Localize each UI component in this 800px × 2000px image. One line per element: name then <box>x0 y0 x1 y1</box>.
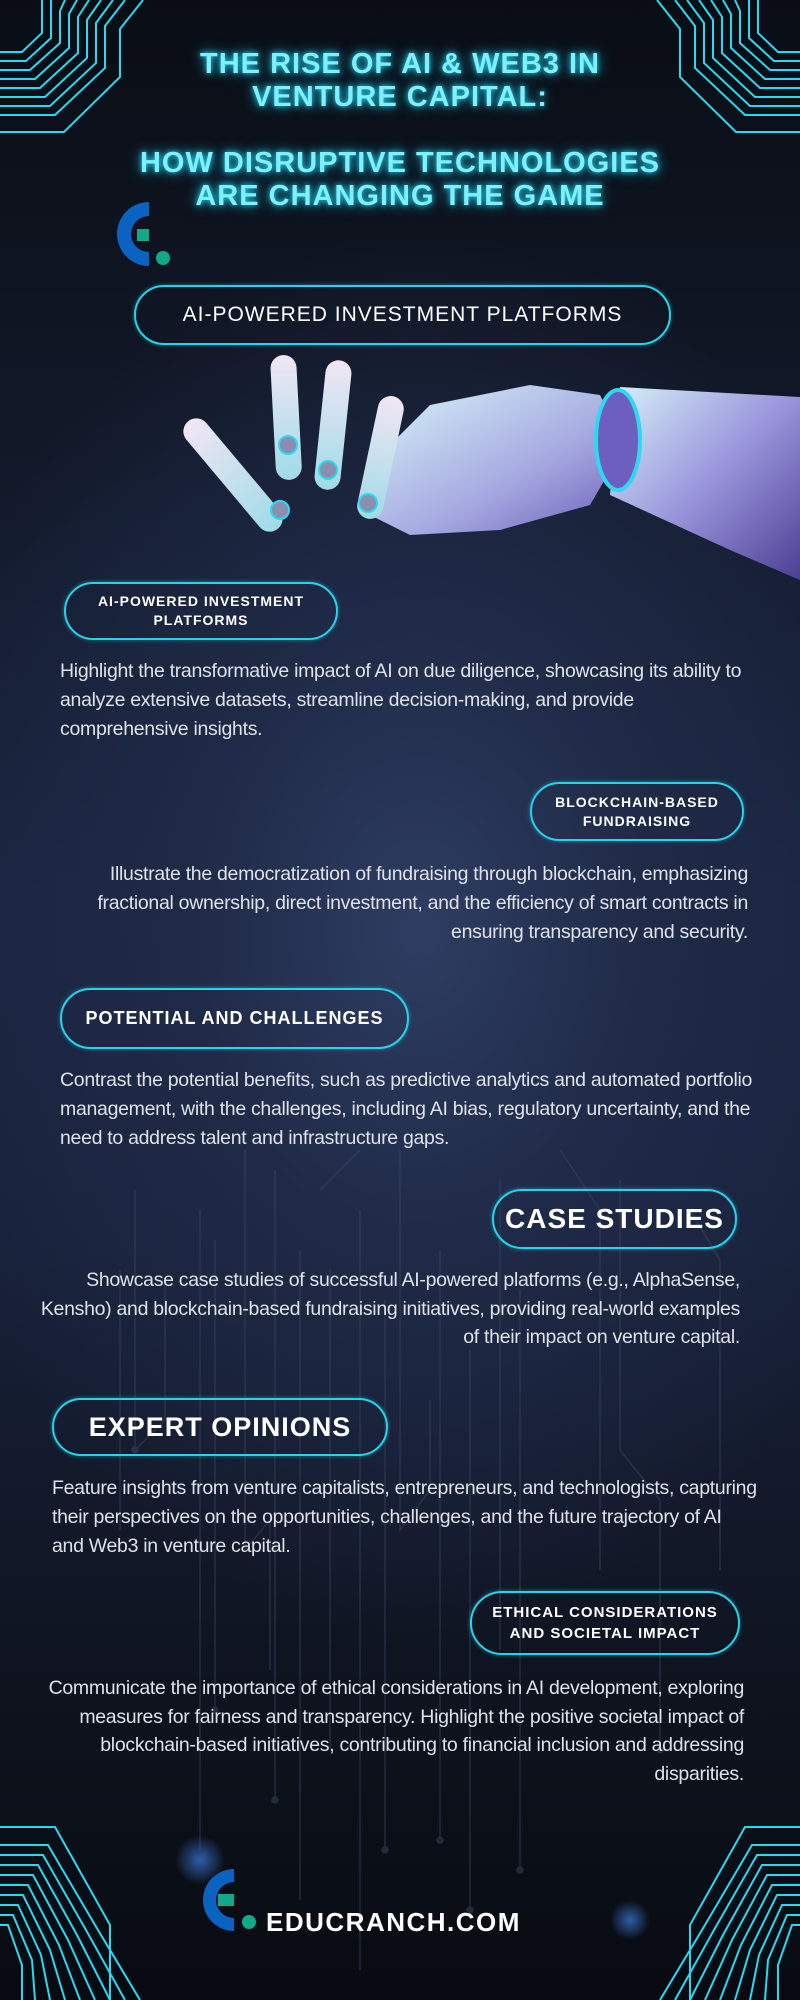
pill: AI-powered investment platforms: PLATFORMS <box>153 612 249 628</box>
pill: ethical considerations: ETHICAL CONSIDERATIONS <box>492 1604 718 1621</box>
glow dots <box>175 1835 225 1885</box>
text: case studies description <box>41 1269 740 1348</box>
pill: AI-powered investment platforms: AI-POWERED INVESTMENT <box>98 593 304 609</box>
text: ethical description: Communicate the importance of ethical considerations in AI development, exploring <box>49 1677 744 1699</box>
text: expert opinions description <box>52 1477 757 1557</box>
pill: potential and challenges <box>60 988 409 1049</box>
text: case studies description: Kensho) and blockchain-based fundraising initiatives, providing real-world examples <box>41 1298 740 1320</box>
logo: top <box>117 202 170 266</box>
pill: case studies <box>492 1189 737 1249</box>
title: HOW DISRUPTIVE TECHNOLOGIES <box>140 147 660 179</box>
text: AI platforms description: comprehensive insights. <box>60 718 262 740</box>
footer: logo and website <box>203 1869 521 1937</box>
title <box>132 44 666 214</box>
decoration: top-left circuit corner <box>0 0 144 133</box>
pill: potential and challenges: POTENTIAL AND CHALLENGES <box>85 1008 384 1028</box>
pill: AI-powered investment platforms (main) <box>134 285 671 345</box>
title: ARE CHANGING THE GAME <box>195 180 605 212</box>
decoration: bottom-left circuit corner <box>0 1826 141 2000</box>
background: faint circuit board <box>119 1150 721 1970</box>
text: ethical description: disparities. <box>654 1762 744 1784</box>
pill: blockchain-based fundraising: BLOCKCHAIN-BASED <box>555 794 719 810</box>
text: AI platforms description <box>60 660 741 740</box>
pill: blockchain-based fundraising <box>530 782 744 841</box>
text: expert opinions description: Feature insights from venture capitalists, entrepreneurs, and technologists, capturing <box>52 1477 757 1499</box>
title: THE RISE OF AI & WEB3 IN <box>200 48 600 80</box>
pill: blockchain-based fundraising: FUNDRAISING <box>583 812 691 828</box>
text: blockchain description: Illustrate the democratization of fundraising through blockchain, emphasizing <box>110 863 748 885</box>
text: AI platforms description: analyze extensive datasets, streamline decision-making, and provide <box>60 689 634 711</box>
text: website: EDUCRANCH.COM <box>266 1907 521 1937</box>
text: case studies description: of their impact on venture capital. <box>463 1326 740 1348</box>
text: potential description: management, with the challenges, including AI bias, regulatory uncertainty, and the <box>60 1098 750 1120</box>
pill: AI-powered investment platforms <box>64 582 338 640</box>
decoration: bottom-right circuit corner <box>659 1826 800 2000</box>
text: ethical description: measures for fairness and transparency. Highlight the positive societal impact of <box>79 1706 744 1728</box>
pill: ethical considerations: AND SOCIETAL IMPACT <box>510 1625 700 1642</box>
text: expert opinions description: their perspectives on the opportunities, challenges, and the future trajectory of AI <box>52 1506 722 1528</box>
pill: expert opinions: EXPERT OPINIONS <box>89 1412 351 1442</box>
title: VENTURE CAPITAL: <box>252 81 548 113</box>
text: potential description: Contrast the potential benefits, such as predictive analytics and automated portfolio <box>60 1069 752 1091</box>
text: AI platforms description: Highlight the transformative impact of AI on due diligence, showcasing its ability to <box>60 660 741 682</box>
pill: expert opinions <box>52 1398 388 1456</box>
text: expert opinions description: and Web3 in venture capital. <box>52 1535 290 1557</box>
text: blockchain description: fractional ownership, direct investment, and the efficiency of smart contracts in <box>97 892 748 914</box>
pill: ethical considerations <box>470 1591 740 1655</box>
text: case studies description: Showcase case studies of successful AI-powered platforms (e.g., AlphaSense, <box>86 1269 740 1291</box>
text: blockchain description: ensuring transparency and security. <box>451 921 748 943</box>
illustration: robotic hand <box>183 355 800 580</box>
pill: case studies: CASE STUDIES <box>505 1203 724 1234</box>
text: ethical description: blockchain-based initiatives, contributing to financial inclusion and addressing <box>100 1734 744 1756</box>
text: potential description <box>60 1069 752 1149</box>
text: potential description: need to address talent and infrastructure gaps. <box>60 1127 449 1149</box>
pill: AI-powered investment platforms (main): AI-POWERED INVESTMENT PLATFORMS <box>183 303 622 326</box>
text: blockchain description <box>97 863 748 943</box>
text: ethical description <box>49 1677 744 1784</box>
logo: footer <box>203 1869 256 1931</box>
decoration: top-right circuit corner <box>656 0 800 133</box>
